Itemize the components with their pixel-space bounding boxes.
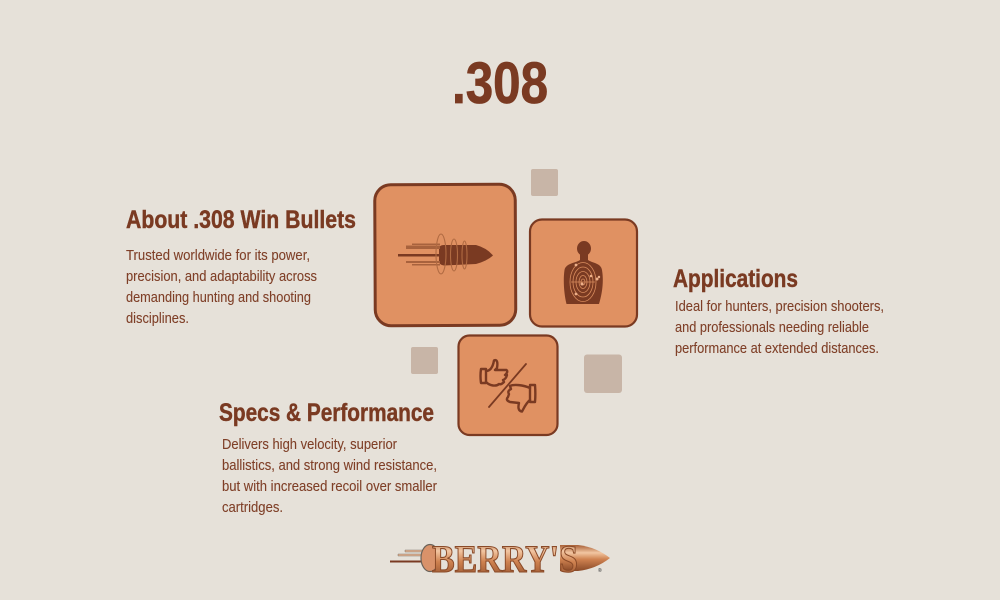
text block: applications: performance at extended distances.: [675, 340, 879, 357]
text block: specs: but with increased recoil over smaller: [222, 478, 437, 495]
panel: applications text: [673, 265, 884, 357]
text block: about: demanding hunting and shooting: [126, 289, 311, 306]
logo: Berry's: ®: [598, 567, 602, 574]
text block: applications: Ideal for hunters, precision shooters,: [675, 298, 884, 315]
text block: specs: cartridges.: [222, 499, 283, 516]
heading: about: About .308 Win Bullets: [126, 206, 356, 234]
text block: specs: [222, 436, 437, 516]
text block: about: Trusted worldwide for its power,: [126, 247, 310, 264]
text block: about: disciplines.: [126, 310, 189, 327]
logo: Berry's: BERRY'S: [432, 538, 578, 581]
panel: about text: [126, 206, 356, 327]
icon: speeding bullet: [398, 234, 493, 274]
panel: target icon tile: [530, 220, 637, 326]
heading: specs: Specs & Performance: [219, 399, 434, 427]
text block: specs: Delivers high velocity, superior: [222, 436, 397, 453]
heading: applications: Applications: [673, 265, 798, 293]
decorative square: top: [531, 169, 558, 196]
decorative square: left: [411, 347, 438, 374]
panel: specs text: [219, 399, 437, 516]
panel: bullet icon tile: [375, 184, 516, 326]
text block: about: [126, 247, 317, 327]
icon: shooting target: [564, 241, 603, 304]
icon: thumbs up and down: [480, 360, 535, 412]
title: .308: [452, 51, 548, 116]
panel: thumbs icon tile: [458, 336, 558, 435]
text block: specs: ballistics, and strong wind resistance,: [222, 457, 437, 474]
text block: about: precision, and adaptability across: [126, 268, 317, 285]
text block: applications: [675, 298, 884, 357]
decorative square: right: [584, 354, 622, 393]
text block: applications: and professionals needing reliable: [675, 319, 869, 336]
